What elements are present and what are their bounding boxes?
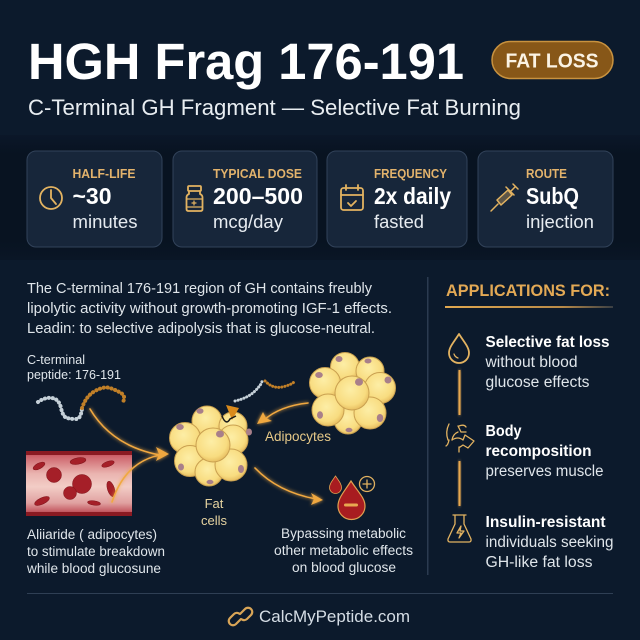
card: half-life: ~30	[72, 183, 112, 209]
card: typical dose: 200–500	[213, 183, 303, 209]
application: body recomposition: Body	[486, 423, 522, 440]
card: frequency	[327, 151, 467, 247]
arrows into fat cells	[90, 409, 169, 502]
footer: CalcMyPeptide.com	[259, 608, 410, 626]
caption: blood glucose	[274, 526, 413, 575]
connector	[458, 461, 460, 506]
icon: drop	[449, 334, 469, 363]
adipocytes label: Adipocytes	[265, 429, 331, 444]
intro paragraph	[27, 281, 392, 337]
caption: vessel: while blood glucosune	[26, 561, 161, 576]
application: selective fat loss: without blood	[484, 354, 578, 371]
blood vessel	[26, 451, 132, 516]
badge: fat loss: FAT LOSS	[506, 50, 598, 72]
icon: muscle	[446, 424, 474, 452]
arrow from adipocytes	[257, 403, 308, 424]
card: frequency: 2x daily	[374, 183, 451, 209]
subtitle: C-Terminal GH Fragment — Selective Fat Burning	[28, 95, 521, 120]
icon: vial	[186, 186, 202, 211]
intro paragraph: The C-terminal 176-191 region of GH contains freubly	[27, 281, 373, 297]
card: half-life	[27, 151, 162, 247]
intro paragraph: lipolytic activity without growth-promoting IGF-1 effects.	[27, 301, 392, 317]
application: selective fat loss: glucose effects	[486, 374, 590, 391]
application: insulin-resistant: individuals seeking	[486, 534, 614, 551]
card: typical dose: TYPICAL DOSE	[213, 167, 302, 181]
icon: flask	[448, 515, 471, 542]
panel: applications	[445, 281, 614, 571]
peptide label	[27, 353, 121, 382]
card: route: ROUTE	[526, 167, 567, 181]
application: selective fat loss: Selective fat loss	[486, 334, 610, 351]
card: frequency: fasted	[374, 211, 424, 232]
application: insulin-resistant	[486, 514, 614, 571]
caption: blood glucose: on blood glucose	[292, 560, 396, 575]
connector	[458, 370, 460, 415]
caption: vessel: Aliiaride ( adipocytes)	[27, 527, 157, 542]
fat cell cluster: right	[310, 352, 396, 434]
application: body recomposition: recomposition	[486, 443, 592, 460]
icon: syringe	[491, 184, 518, 211]
caption: blood glucose: Bypassing metabolic	[281, 526, 406, 541]
applications heading: APPLICATIONS FOR:	[446, 281, 610, 300]
fat cells label: Fat	[205, 496, 224, 511]
caption: vessel	[26, 527, 165, 576]
application: body recomposition: preserves muscle	[486, 463, 604, 480]
card: route: injection	[526, 211, 594, 232]
card: half-life: minutes	[72, 211, 138, 232]
arrow to blood glucose	[255, 468, 323, 505]
peptide label: C-terminal	[27, 353, 85, 367]
fat cells label: cells	[201, 513, 227, 528]
icon: calendar	[341, 185, 363, 210]
icon: clock	[40, 187, 62, 209]
card: half-life: HALF-LIFE	[72, 167, 136, 181]
receptor with bound peptide	[222, 381, 294, 422]
icon: blood drops with plus and minus	[330, 476, 374, 520]
footer rule	[27, 593, 613, 594]
peptide label: peptide: 176-191	[27, 368, 121, 382]
peptide chain	[38, 387, 124, 419]
title: HGH Frag 176-191	[28, 33, 464, 90]
intro paragraph: Leadin: to selective adipolysis that is glucose-neutral.	[27, 321, 375, 337]
fat cells label	[201, 496, 227, 528]
fat cell cluster: left	[170, 406, 252, 486]
icon: link	[229, 608, 252, 625]
card: typical dose: mcg/day	[213, 211, 284, 232]
card: typical dose	[173, 151, 317, 247]
caption: vessel: to stimulate breakdown	[27, 544, 165, 559]
divider	[427, 277, 428, 575]
application: selective fat loss	[484, 334, 610, 391]
caption: blood glucose: other metabolic effects	[274, 543, 413, 558]
application: body recomposition	[486, 423, 604, 480]
card: route: SubQ	[526, 183, 579, 209]
application: insulin-resistant: GH-like fat loss	[486, 554, 593, 571]
red blood cells	[32, 456, 117, 507]
badge: fat loss	[492, 42, 613, 78]
card: frequency: FREQUENCY	[374, 167, 448, 181]
card: route	[478, 151, 613, 247]
application: insulin-resistant: Insulin-resistant	[486, 514, 606, 531]
stats band background	[0, 135, 640, 260]
